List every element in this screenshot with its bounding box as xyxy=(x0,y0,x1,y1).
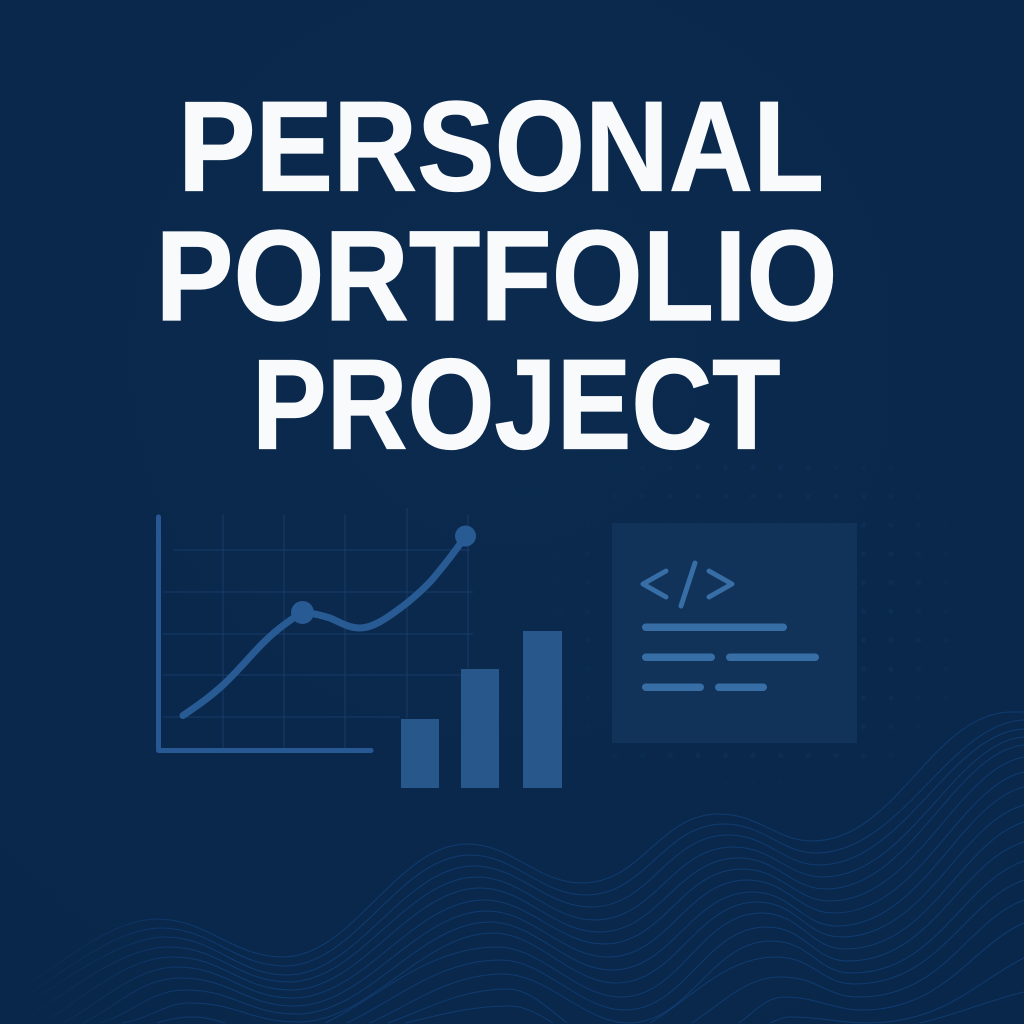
icon: code brackets xyxy=(643,563,732,606)
chart axes xyxy=(158,517,371,750)
bar 3 xyxy=(523,631,562,788)
title line 3: PROJECT xyxy=(252,334,780,476)
data point end xyxy=(455,526,476,546)
bar chart xyxy=(401,631,562,788)
title line 2: PORTFOLIO xyxy=(156,205,838,348)
code lines xyxy=(642,624,819,691)
wave line pattern xyxy=(0,712,1024,1023)
title xyxy=(156,76,838,476)
card background xyxy=(612,523,857,743)
data point middle xyxy=(291,601,314,624)
chart grid xyxy=(163,508,473,748)
line chart xyxy=(158,508,476,750)
title line 1: PERSONAL xyxy=(178,76,824,218)
dot pattern xyxy=(723,494,893,756)
bar 2 xyxy=(461,669,499,788)
bar 1 xyxy=(401,719,439,788)
trend line xyxy=(183,537,465,716)
panel: code card xyxy=(612,523,857,743)
